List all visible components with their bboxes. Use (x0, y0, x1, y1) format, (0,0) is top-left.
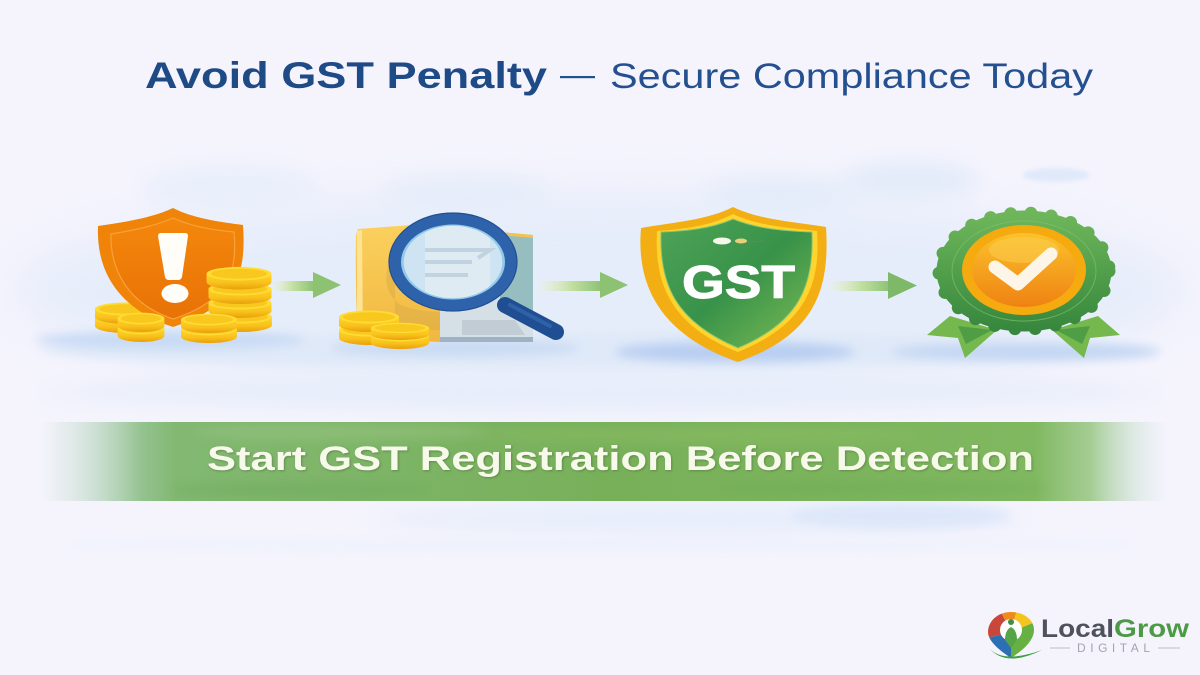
small leaf marks (713, 238, 764, 244)
logo wordmark: Local (1041, 615, 1114, 643)
logo: Grow (1114, 615, 1190, 643)
arrow 2 (540, 272, 628, 298)
logo pin (988, 612, 1042, 658)
icon: folder with magnifier (339, 213, 556, 349)
ribbons (927, 316, 1120, 358)
folder (356, 225, 440, 342)
coins: front left stack (118, 313, 164, 342)
banner text: Start GST Registration Before Detection (207, 440, 1034, 478)
medal centre (962, 225, 1086, 315)
icon: GST shield (640, 207, 827, 362)
icon: approved badge (927, 213, 1120, 358)
icon: exclamation mark (158, 233, 188, 303)
coins: front right stack (181, 314, 237, 343)
arrow 1 (272, 272, 341, 298)
document back (430, 240, 533, 337)
check mark (995, 254, 1051, 284)
title (145, 55, 1094, 96)
banner (40, 422, 1170, 501)
coins: tall stack (207, 267, 272, 332)
rosette (939, 213, 1109, 329)
coins: folder coins (339, 310, 429, 349)
coins: back stack (95, 302, 155, 333)
title: Secure Compliance Today (610, 57, 1094, 96)
icon: warning shield with coins (95, 208, 272, 343)
arrow 3 (830, 272, 917, 299)
label: GST: GST (682, 256, 795, 308)
logo (988, 612, 1189, 658)
magnifier handle (505, 305, 556, 332)
logo: DIGITAL (1077, 641, 1150, 655)
title: Avoid GST Penalty (145, 55, 548, 96)
magnifier lens (389, 213, 517, 311)
